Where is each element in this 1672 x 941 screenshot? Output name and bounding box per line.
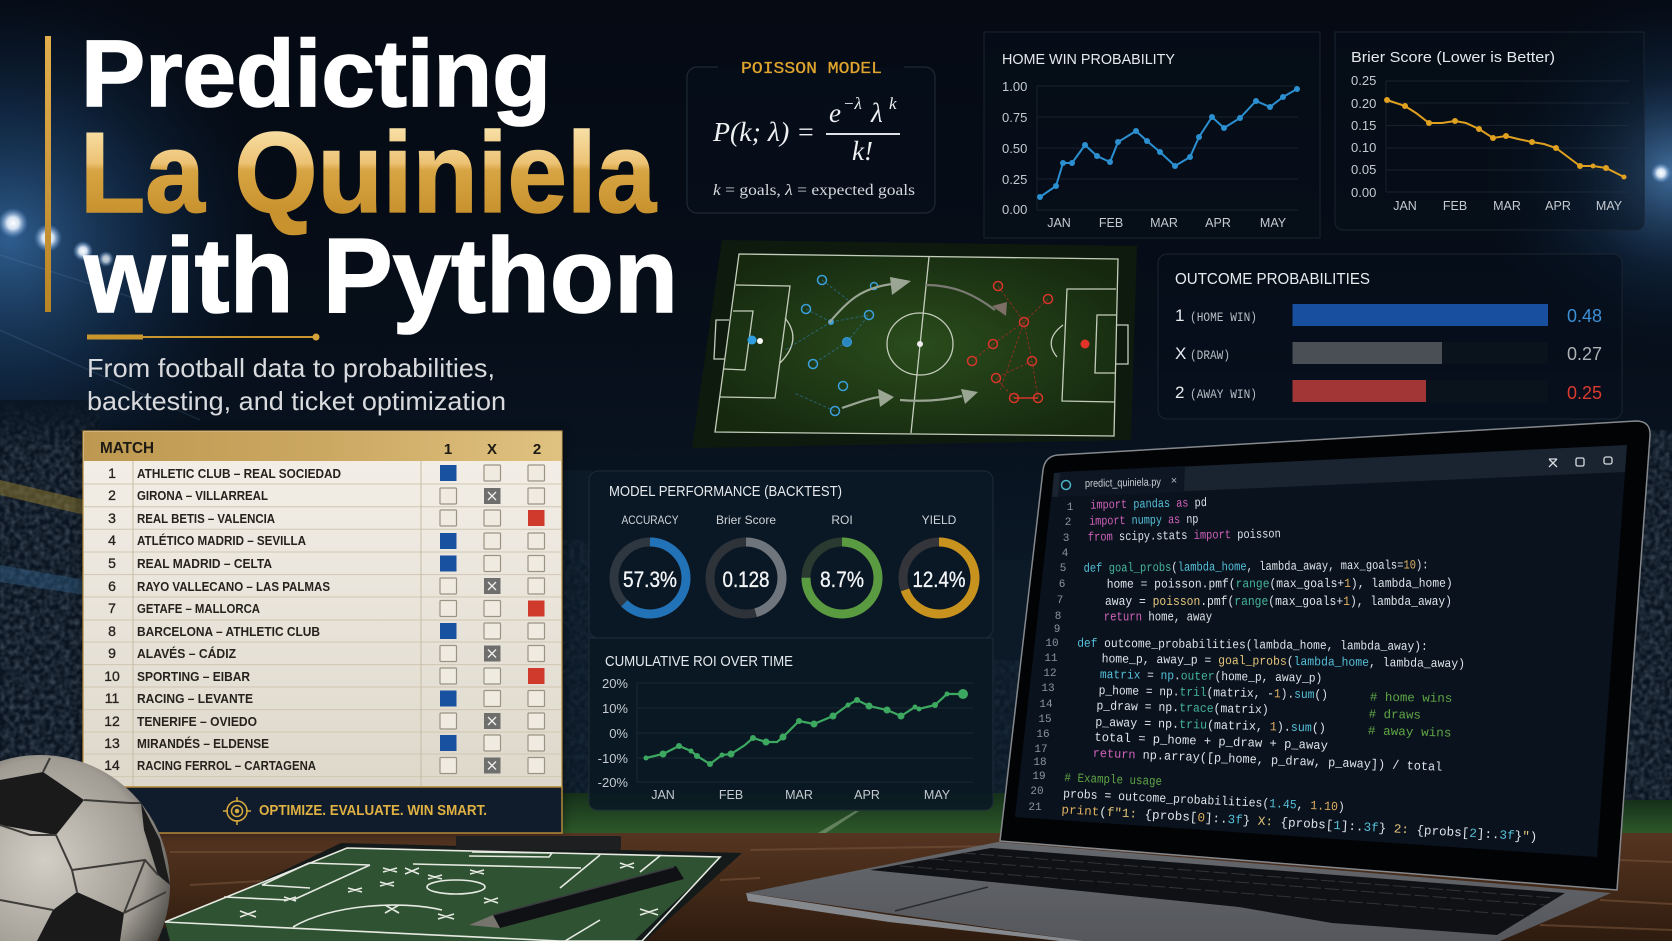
line numbers: 20 [1030,786,1044,798]
outcome: away win [1175,380,1602,403]
row 1: ATHLETIC CLUB – REAL SOCIEDAD [137,466,341,481]
y ticks: -20% [598,775,628,790]
title line: La Quiniela: La Quiniela [80,110,657,237]
outcome: draw: X [1175,344,1186,363]
python code: def goal_probs(lambda_home, lambda_away, max_goals=10): [1084,558,1429,576]
row 3: 3 [108,510,116,526]
row 10 [104,668,544,684]
x months [1393,199,1623,213]
poisson formula: k! [852,136,873,166]
line numbers: 2 [1065,517,1071,529]
python code: print(f"1: {probs[0]:.3f} X: {probs[1]:.3f} 2: {probs[2]:.3f}") [1061,803,1538,845]
outcome: away win: 0.25 [1567,383,1602,403]
title block [45,21,678,335]
laptop [746,421,1650,941]
donut: brier score: Brier Score [716,513,776,527]
tactics clipboard [160,836,742,941]
row 9: 9 [108,645,116,661]
row 5: 5 [108,555,116,571]
ticket header: MATCH [100,440,154,457]
y ticks: 10% [602,701,628,716]
tab close: × [1171,475,1177,487]
row 5: REAL MADRID – CELTA [137,556,273,571]
outcome: draw [1175,342,1602,364]
row 14 [104,757,544,774]
row 2 [108,487,544,504]
x months: FEB [1099,216,1123,230]
title rule [87,334,320,340]
row 4 [108,532,544,549]
y ticks: 0.00 [1002,202,1027,217]
x months: MAY [924,788,951,802]
line numbers: 3 [1063,533,1069,545]
laptop base [746,842,1611,941]
line numbers: 1 [1067,502,1074,514]
row 6 [108,578,544,594]
y ticks: 0.20 [1351,96,1376,111]
blue line series [1037,86,1300,200]
python code: matrix = np.outer(home_p, away_p) [1100,668,1322,686]
donut: roi [806,513,878,614]
row 6: RAYO VALLECANO – LAS PALMAS [137,579,330,594]
poisson caption: k = goals, λ = expected goals [713,182,915,199]
donut: accuracy [614,513,686,614]
row 3: REAL BETIS – VALENCIA [137,511,276,526]
outcome: away win: (AWAY WIN) [1190,388,1257,402]
x months: MAR [1150,216,1178,230]
x months: MAR [1493,199,1521,213]
y ticks: 0.05 [1351,162,1376,177]
ticket footer [84,787,562,833]
chart heading: HOME WIN PROBABILITY [1002,51,1175,68]
python code: from scipy.stats import poisson [1088,527,1281,545]
y ticks: -10% [598,751,628,766]
row 4: ATLÉTICO MADRID – SEVILLA [137,533,307,548]
panel: football pitch tactics [692,240,1137,448]
row 9 [108,645,544,662]
python code: return home, away [1104,611,1213,625]
row 6: 6 [108,578,116,594]
poisson formula: −λ [843,94,862,113]
outcome: draw: (DRAW) [1190,349,1230,363]
chart heading: Brier Score (Lower is Better) [1351,49,1555,66]
row 7 [108,600,544,616]
icon: target [223,797,251,825]
title line: with Python: with Python [83,217,678,335]
line numbers: 9 [1054,624,1060,636]
line numbers: 6 [1059,579,1065,591]
row 10: 10 [104,668,120,684]
python code: probs = outcome_probabilities(1.45, 1.10) [1063,787,1345,815]
python code: import pandas as pd [1090,496,1207,513]
y ticks: 0.15 [1351,118,1376,133]
line numbers: 17 [1034,744,1048,756]
row 8 [108,623,544,639]
x months: MAY [1260,216,1287,230]
row 14: RACING FERROL – CARTAGENA [137,758,317,773]
y ticks: 0.00 [1351,185,1376,200]
tab filename: predict_quiniela.py [1085,476,1161,490]
donut: brier score [710,513,782,614]
row 9: ALAVÉS – CÁDIZ [137,646,236,661]
x months: JAN [1393,199,1417,213]
outcome heading: OUTCOME PROBABILITIES [1175,271,1370,288]
panel: brier score chart [1335,32,1644,230]
python code: home = poisson.pmf(range(max_goals+1), lambda_home) [1107,577,1453,592]
row 7: GETAFE – MALLORCA [137,601,261,616]
x months [651,788,951,802]
row 8: 8 [108,623,116,639]
python code: def outcome_probabilities(lambda_home, lambda_away): [1077,637,1428,654]
x months: APR [1545,199,1571,213]
outcome: home win: (HOME WIN) [1190,311,1257,325]
poisson formula: λ [870,98,883,128]
green line series [644,689,968,767]
python code: # away wins [1368,724,1452,741]
y ticks: 20% [602,676,628,691]
poisson formula: P(k; λ) = [712,117,815,147]
row 12: TENERIFE – OVIEDO [137,714,257,729]
poisson formula [712,94,900,166]
accent bar [45,36,51,312]
y ticks: 0.50 [1002,141,1027,156]
x months: FEB [1443,199,1467,213]
subtitle [87,353,506,416]
row 12 [104,713,544,729]
laptop lid [1000,421,1650,890]
row 11: RACING – LEVANTE [137,691,253,706]
y ticks: 0.75 [1002,110,1027,125]
donut: yield: YIELD [922,513,957,527]
x months: JAN [651,788,675,802]
row 11: 11 [105,690,119,706]
attack arrows [829,277,1007,408]
row 14: 14 [104,757,120,773]
line numbers: 14 [1039,699,1053,711]
line numbers: 11 [1044,653,1058,665]
donut: yield: 12.4% [912,567,966,592]
poisson formula: e [829,98,841,128]
orange line series [1384,97,1626,180]
line numbers [1028,502,1074,814]
python code: import numpy as np [1089,513,1199,529]
ticket header: X [487,441,497,458]
panel: outcome probabilities [1158,254,1622,419]
title line: Predicting: Predicting [81,21,551,127]
y ticks [598,676,628,790]
line numbers: 21 [1028,802,1042,814]
row 13 [104,735,544,751]
line numbers: 4 [1062,548,1069,560]
editor tab bar [1052,445,1627,497]
row 12: 12 [104,713,120,729]
row 13: MIRANDÉS – ELDENSE [137,736,269,751]
x months: APR [1205,216,1231,230]
y ticks [1002,79,1027,217]
x months [1047,216,1287,230]
chalk lines [165,848,720,941]
y ticks [1351,73,1376,200]
line numbers: 7 [1057,595,1063,607]
row 11 [105,690,544,706]
python code: away = poisson.pmf(range(max_goals+1), lambda_away) [1105,595,1452,609]
row 13: 13 [104,735,120,751]
panel: model performance [589,471,993,638]
away team nodes [968,282,1090,402]
outcome: home win: 1 [1175,306,1184,325]
line numbers: 5 [1060,563,1066,575]
row 2: GIRONA – VILLARREAL [137,488,268,503]
donut: yield [903,513,975,614]
row 7: 7 [108,600,116,616]
poisson formula: k [889,94,897,113]
donut: accuracy: ACCURACY [622,513,678,527]
home team nodes [748,276,878,416]
python code: home_p, away_p = goal_probs(lambda_home, lambda_away) [1102,652,1465,671]
row 3 [108,510,544,526]
donut: roi: 8.7% [820,567,864,592]
x months: FEB [719,788,743,802]
line numbers: 19 [1032,771,1046,783]
line numbers: 18 [1033,757,1047,769]
donut: brier score: 0.128 [722,567,770,592]
window icons [1549,457,1612,467]
row 4: 4 [108,532,116,548]
line numbers: 15 [1038,714,1052,726]
panel: poisson model [687,60,935,213]
pen [469,866,684,928]
python code: total = p_home + p_draw + p_away [1094,731,1329,753]
line numbers: 10 [1045,638,1059,650]
x months: APR [854,788,880,802]
panel: cumulative roi chart [589,638,993,810]
line numbers: 16 [1036,729,1050,741]
roi heading: CUMULATIVE ROI OVER TIME [605,654,793,670]
x months: MAY [1596,199,1623,213]
subtitle: backtesting, and ticket optimization [87,386,506,416]
line numbers: 13 [1041,683,1055,695]
outcome: home win: 0.48 [1567,306,1602,326]
laptop screen [1015,445,1627,857]
tagline: OPTIMIZE. EVALUATE. WIN SMART. [259,803,487,819]
pitch markings [714,254,1128,436]
python code: # draws [1369,708,1421,723]
python code: return np.array([p_home, p_draw, p_away]) / total [1092,747,1443,775]
row 2: 2 [108,487,116,503]
y ticks: 1.00 [1002,79,1027,94]
tab icon [1062,480,1070,490]
python code: # Example usage [1064,771,1162,789]
python code: p_draw = np.trace(matrix) [1096,699,1269,717]
line numbers: 12 [1043,668,1057,680]
row 1: 1 [108,465,116,481]
row 10: SPORTING – EIBAR [137,669,251,684]
row 5 [108,555,544,572]
x months: JAN [1047,216,1071,230]
y ticks: 0.25 [1002,172,1027,187]
ticket header: 2 [533,441,541,458]
x months: MAR [785,788,813,802]
row 1 [108,465,544,481]
python code: # home wins [1370,691,1452,706]
python code: p_home = np.tril(matrix, -1).sum() [1099,684,1328,702]
line numbers: 8 [1055,611,1061,623]
donut: roi: ROI [831,513,853,527]
subtitle: From football data to probabilities, [87,353,495,383]
ticket header [84,432,561,461]
ticket header: 1 [444,441,452,458]
panel: match ticket [83,431,563,834]
python code [1061,496,1538,845]
y ticks: 0.10 [1351,140,1376,155]
outcome: away win: 2 [1175,383,1184,402]
soccer ball [0,755,170,941]
python code: p_away = np.triu(matrix, 1).sum() [1095,716,1326,736]
row 8: BARCELONA – ATHLETIC CLUB [137,624,320,639]
outcome: draw: 0.27 [1567,344,1602,364]
outcome: home win [1175,304,1602,326]
donut: accuracy: 57.3% [623,567,677,592]
performance heading: MODEL PERFORMANCE (BACKTEST) [609,484,842,500]
y ticks: 0.25 [1351,73,1376,88]
poisson heading: POISSON MODEL [741,60,882,79]
panel: home win probability chart [984,32,1320,238]
y ticks: 0% [609,726,628,741]
